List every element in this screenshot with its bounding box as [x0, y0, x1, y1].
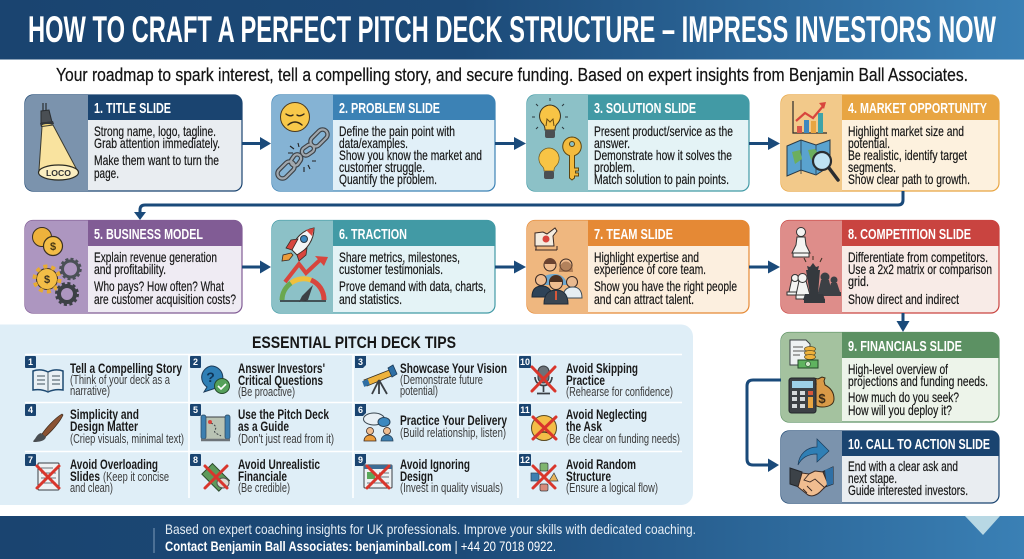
icon: gears: $: [44, 274, 50, 286]
heading: 2. PROBLEM SLIDE: [339, 100, 440, 117]
tip 4: (Criep visuals, minimal text): [70, 431, 184, 446]
text block: Prove demand with data, charts,: [339, 278, 486, 294]
icon: open book: [33, 370, 63, 392]
text block: [94, 123, 220, 181]
panel: 4. market opportunity: [781, 95, 999, 191]
panel: 10. call to action slide: [781, 431, 999, 503]
icon: growth chart: [793, 101, 827, 133]
text block: and profitability.: [94, 261, 166, 277]
text block: Match solution to pain points.: [594, 171, 729, 187]
tip 7: Slides: [70, 469, 100, 484]
icon: sad face and broken chain: [275, 102, 330, 181]
icon: white pawn: [792, 228, 810, 257]
text block: experience of core team.: [594, 261, 706, 277]
icon: curved arrow and handshake: [790, 439, 833, 496]
tip 4: Design Matter: [70, 419, 139, 434]
icon: two people talking: [364, 413, 393, 441]
tip 9: 9: [358, 455, 363, 465]
arrow: 5 to 6: [242, 260, 271, 274]
text block: Explain revenue generation: [94, 249, 217, 265]
tip 6: (Build relationship, listen): [400, 425, 506, 440]
icon: crossed-out shapes: [531, 463, 558, 491]
tip 10: [519, 356, 673, 399]
tip 11: (Be clear on funding needs): [566, 431, 680, 446]
tip 3: potential): [400, 383, 438, 398]
text block: Show clear path to growth.: [848, 171, 970, 187]
tip 2: Critical Questions: [238, 373, 323, 388]
tip 6: Practice Your Delivery: [400, 413, 507, 428]
tip 10: (Rehearse for confidence): [566, 384, 673, 399]
tip 11: 11: [520, 405, 530, 415]
heading: 7. TEAM SLIDE: [594, 226, 673, 243]
text block: Quantify the problem.: [339, 171, 437, 187]
tip 11: Avoid Neglecting: [566, 407, 647, 422]
text block: [94, 249, 236, 307]
tip 5: 5: [193, 405, 198, 415]
arrow: 6 to 7: [495, 260, 526, 274]
heading: 3. SOLUTION SLIDE: [594, 100, 696, 117]
panel: 8. competition slide: [781, 220, 999, 313]
icon: team of people: [532, 258, 582, 304]
text block: [848, 123, 970, 187]
icon: gears: [34, 259, 80, 304]
icon: whiteboard idea: [535, 228, 557, 250]
panel: 3. solution slide: [527, 95, 749, 191]
icon: crossed-out window: [364, 465, 392, 488]
tip 8: [190, 454, 320, 495]
arrow: 8 to 9: [896, 313, 910, 332]
heading: 9. FINANCIALS SLIDE: [848, 338, 962, 355]
text block: Who pays? How often? What: [94, 278, 224, 294]
arrow: 1 to 2: [242, 137, 271, 150]
text block: [848, 458, 968, 498]
panel: 1. title slide: [25, 95, 242, 191]
tip 4: 4: [28, 405, 33, 415]
arrow: 9 to 10: [747, 380, 781, 472]
arrow: 7 to 8: [749, 260, 780, 274]
tip 9: [355, 454, 503, 495]
tip 9: Avoid Ignoring: [400, 457, 470, 472]
text block: segments.: [848, 159, 896, 175]
arrow: 3 to 4: [749, 137, 780, 150]
tip 1: [25, 356, 182, 398]
tip 9: Design: [400, 469, 433, 484]
text block: End with a clear ask and: [848, 458, 958, 474]
text block: potential.: [848, 135, 890, 151]
panel: 9. financials slide: [781, 332, 999, 422]
icon: chess pieces: [787, 256, 841, 303]
icon: paint brush: [33, 414, 63, 442]
text block: are customer acquisition costs?: [94, 291, 236, 307]
icon: map and magnifier: [787, 140, 838, 180]
tip 12: Avoid Random: [566, 457, 636, 472]
text block: Grab attention immediately.: [94, 135, 220, 151]
panel: essential pitch deck tips: [0, 324, 693, 505]
tip 8: (Be credible): [238, 480, 290, 495]
footer text: [165, 521, 696, 554]
panel: 7. team slide: [527, 220, 749, 313]
heading: 8. COMPETITION SLIDE: [848, 226, 971, 243]
heading: 1. TITLE SLIDE: [94, 100, 171, 117]
tip 7: 7: [28, 455, 33, 465]
icon: crossed-out money: [202, 464, 229, 491]
tip 4: [25, 404, 184, 446]
text block: How much do you seek?: [848, 389, 959, 405]
tip 2: (Be proactive): [238, 384, 295, 399]
icon: map scroll: [201, 415, 230, 440]
text block: Present product/service as the: [594, 123, 733, 139]
tip 8: Financiale: [238, 469, 287, 484]
tip 2: [190, 356, 325, 399]
tip 3: 3: [358, 357, 363, 367]
header banner: [0, 0, 1024, 60]
icon: calculator and money bag: [789, 377, 834, 413]
tip 8: Avoid Unrealistic: [238, 457, 320, 472]
text block: Highlight market size and: [848, 123, 964, 139]
tip 2: 2: [193, 357, 198, 367]
footer text: Based on expert coaching insights for UK professionals. Improve your skills with dedicated coaching.: [165, 521, 696, 537]
text block: problem.: [594, 159, 635, 175]
tip 12: 12: [520, 455, 530, 465]
text block: High-level overview of: [848, 361, 948, 377]
tip 11: [519, 404, 680, 446]
icon: question and check bubbles: ?: [206, 369, 215, 385]
tip 3: Showcase Your Vision: [400, 361, 507, 376]
tip 7: Avoid Overloading: [70, 457, 158, 472]
icon: rocket: [282, 228, 314, 261]
text block: page.: [94, 165, 119, 181]
panel: 2. problem slide: [272, 95, 495, 191]
icon: crossed-out microphone: [532, 366, 555, 394]
panel: 6. traction: [272, 220, 495, 313]
icon: crossed-out document: [37, 463, 59, 490]
arrow: 4 down and back to 5: [134, 191, 903, 220]
text block: Show you know the market and: [339, 147, 482, 163]
text block: next stape.: [848, 470, 897, 486]
text block: customer struggle.: [339, 159, 425, 175]
text block: Highlight expertise and: [594, 249, 699, 265]
footer text: Contact Benjamin Ball Associates: benjaminball.com | +44 20 7018 0922.: [165, 538, 556, 554]
panel: 5. business model: [25, 220, 242, 313]
text block: Make them want to turn the: [94, 152, 219, 168]
text block: [594, 249, 737, 307]
icon: calculator and money bag: $: [818, 391, 826, 406]
tip 9: (Invest in quality visuals): [400, 480, 503, 495]
tip 12: [519, 454, 658, 495]
icon: coins: $: [50, 241, 56, 253]
tip 7: (Keep it concise: [103, 469, 169, 484]
text block: Strong name, logo, tagline.: [94, 123, 216, 139]
icon: telescope: [362, 365, 397, 394]
text block: [848, 249, 992, 307]
tip 10: 10: [520, 357, 530, 367]
text block: [339, 123, 482, 187]
tip 2: Answer Investors': [238, 361, 325, 376]
text block: How will you deploy it?: [848, 402, 952, 418]
text block: Be realistic, identify target: [848, 147, 967, 163]
tip 10: Practice: [566, 373, 605, 388]
text block: Demonstrate how it solves the: [594, 147, 732, 163]
tip 3: (Demonstrate future: [400, 372, 483, 387]
text block: answer.: [594, 135, 630, 151]
tip 1: 1: [28, 357, 33, 367]
decorative chevron: [965, 516, 1000, 535]
tip 5: Use the Pitch Deck: [238, 407, 329, 422]
tip 6: 6: [358, 405, 363, 415]
icon: crossed-out angry face: [532, 416, 556, 440]
tip 12: Structure: [566, 469, 611, 484]
heading: 5. BUSINESS MODEL: [94, 226, 203, 243]
tip 1: narrative): [70, 383, 110, 398]
text block: data/examples.: [339, 135, 408, 151]
footer band: [0, 516, 1024, 559]
text block: Guide interested investors.: [848, 482, 968, 498]
heading: 6. TRACTION: [339, 226, 407, 243]
tip 6: [355, 404, 507, 441]
tip 5: as a Guide: [238, 419, 289, 434]
tip 4: Simplicity and: [70, 407, 139, 422]
text block: Show direct and indirect: [848, 291, 959, 307]
tip 12: (Ensure a logical flow): [566, 480, 658, 495]
text block: customer testimonials.: [339, 261, 443, 277]
text block: and statistics.: [339, 291, 402, 307]
heading: ESSENTIAL PITCH DECK TIPS: [252, 333, 456, 352]
tip 3: [355, 356, 507, 398]
icon: spotlight on logo: LOCO: [46, 169, 71, 178]
tip 8: 8: [193, 455, 198, 465]
text block: Define the pain point with: [339, 123, 455, 139]
tip 10: Avoid Skipping: [566, 361, 638, 376]
icon: spotlight on logo: [38, 103, 78, 180]
text block: [848, 361, 988, 418]
tip 7: and clean): [70, 480, 113, 495]
text block: [594, 123, 733, 187]
icon: coins: [32, 228, 62, 256]
text block: grid.: [848, 273, 869, 289]
tip 1: (Think of your deck as a: [70, 372, 171, 387]
text block: Share metrics, milestones,: [339, 249, 460, 265]
icon: gauge with rising arrow: [280, 256, 328, 302]
icon: light bulbs and key: [532, 98, 581, 180]
text block: [339, 249, 486, 307]
text block: Show you have the right people: [594, 278, 737, 294]
tip 7: [25, 454, 169, 495]
text block: and can attract talent.: [594, 291, 694, 307]
tip 5: [190, 404, 334, 446]
tip 11: the Ask: [566, 419, 602, 434]
tip 5: (Don't just read from it): [238, 431, 334, 446]
icon: report with coins and cash: [790, 340, 818, 368]
arrow: 2 to 3: [495, 137, 526, 150]
tip 1: Tell a Compelling Story: [70, 361, 182, 376]
